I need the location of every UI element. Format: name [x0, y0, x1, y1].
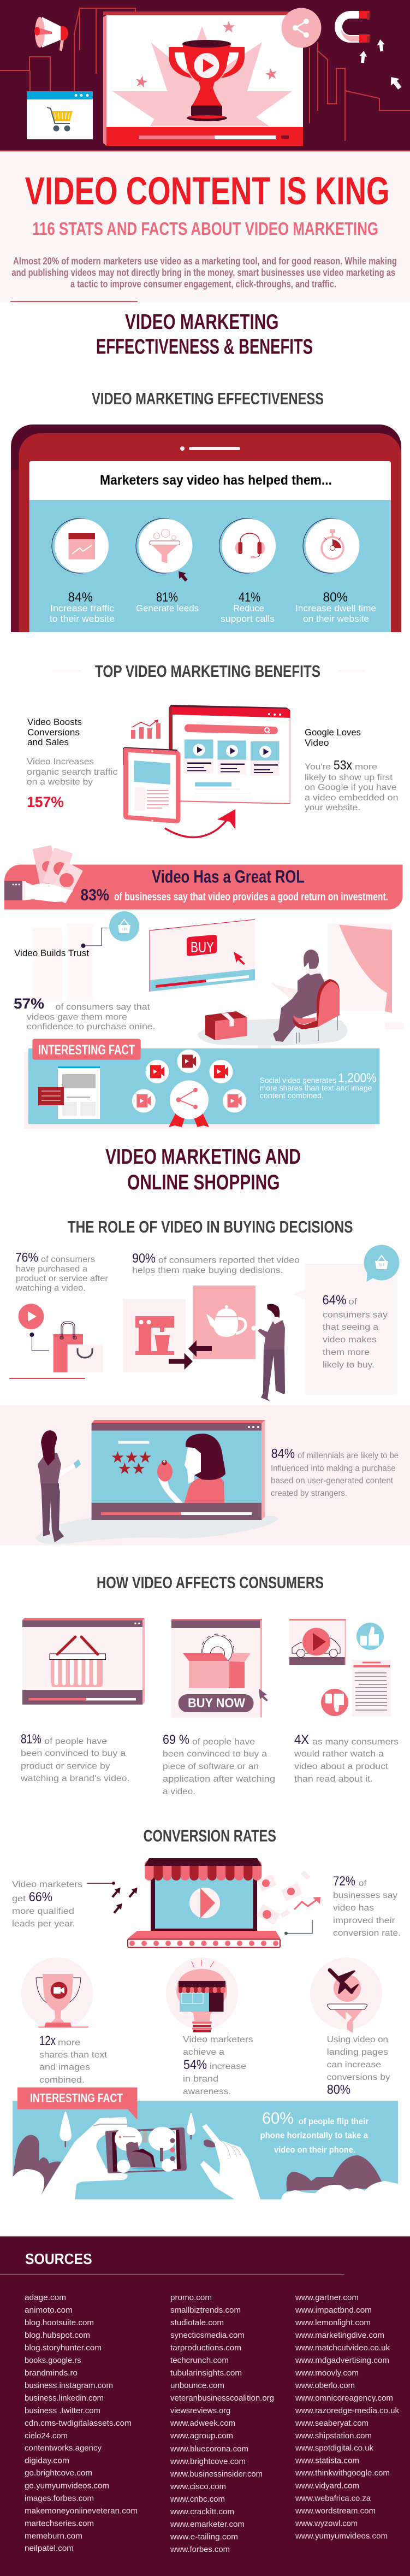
- star burst: [112, 26, 292, 126]
- panel: title block: [0, 151, 410, 302]
- callout connector: [83, 928, 107, 946]
- stat: 80% increase dwell time: 80%: [323, 590, 348, 605]
- fact text: 60%: [262, 2109, 294, 2127]
- text block: 54% brand awareness: in brand: [183, 2074, 218, 2084]
- text block: video builds trust: of consumers say that: [56, 1003, 150, 1012]
- icon: thumbs up: [356, 1623, 384, 1650]
- stat: 84% increase traffic: Increase traffic: [50, 603, 115, 614]
- panel: tablet with marketer stats: [11, 425, 401, 632]
- text block: 90% of consumers: [132, 1251, 300, 1275]
- text block: google loves video: more: [355, 763, 377, 771]
- text block: google loves video: [305, 728, 399, 812]
- text block: 4x as many consumers: would rather watch a: [294, 1749, 384, 1759]
- text block: google loves video: a video embedded on: [305, 793, 399, 803]
- icon: teapot: [206, 1305, 246, 1337]
- text block: 54% brand awareness: [183, 2035, 253, 2096]
- text block: video boosts conversions: on a website by: [27, 777, 93, 787]
- sources column 3: www.wyzowl.com: [295, 2520, 358, 2528]
- money bills: [257, 1871, 310, 1925]
- fact text: 1,200%: [338, 1071, 377, 1086]
- phone: [105, 2127, 187, 2173]
- player controls: [106, 127, 303, 146]
- illustration: product pages and shopper: [123, 1286, 285, 1401]
- sources column 2: veteranbusinesscoalition.org: [170, 2394, 274, 2403]
- icon: share: [282, 8, 321, 48]
- text block: 90% of consumers: helps them make buying dedisions.: [132, 1266, 283, 1275]
- tablet device: [123, 747, 180, 823]
- text block: video boosts conversions: 157%: [27, 794, 64, 810]
- text block: 69% of people: been convinced to buy a: [163, 1749, 267, 1759]
- text block: 4x as many consumers: video about a product: [294, 1762, 389, 1771]
- fact text: Social video generates: [260, 1076, 336, 1084]
- text block: 4x as many consumers: as many consumers: [312, 1737, 399, 1747]
- text block: 54% brand awareness: Video marketers: [183, 2035, 253, 2044]
- text block: video boosts conversions: Video Increases: [27, 757, 94, 767]
- sources column 1: blog.hubspot.com: [25, 2331, 90, 2340]
- stat: 41% reduce support calls: support calls: [221, 614, 275, 624]
- text block: video builds trust: confidence to purchase onine.: [27, 1022, 155, 1031]
- text block: 80% landing pages: Using video on: [327, 2035, 388, 2044]
- text block: video boosts conversions: [27, 717, 118, 810]
- presenter with perfume: [157, 1434, 225, 1503]
- sources column 1: brandminds.ro: [25, 2369, 78, 2378]
- speech panel: 64% of consumers: 64%: [322, 1293, 346, 1308]
- speech panel: 64% of consumers: of: [348, 1297, 358, 1307]
- sources column 2: www.businessinsider.com: [170, 2470, 263, 2479]
- bushes and clouds right: [281, 2155, 398, 2200]
- speech panel: 64% of consumers: video makes: [323, 1335, 377, 1345]
- sources heading: SOURCES: [25, 2250, 92, 2267]
- text block: 72% of businesses: improved their: [333, 1916, 395, 1925]
- speech panel: 64% of consumers: that seeing a: [323, 1323, 378, 1332]
- text block: 76% of consumers: 76%: [15, 1251, 38, 1265]
- stat: 84% increase traffic: [50, 518, 115, 624]
- sources column 1: business .twitter.com: [25, 2407, 100, 2415]
- icon: gear and box: [183, 1634, 251, 1688]
- text block: 81% of people: watching a brand's video.: [20, 1774, 129, 1783]
- text block: 80% landing pages: can increase: [327, 2060, 381, 2070]
- sources column 2: www.cnbc.com: [170, 2495, 225, 2504]
- sources column 3: www.shipstation.com: [295, 2432, 372, 2441]
- heading: effectiveness and benefits: EFFECTIVENESS & BENEFITS: [96, 335, 313, 358]
- arrow: curved red arrow: [165, 809, 235, 838]
- text block: 54% brand awareness: awareness.: [183, 2087, 231, 2096]
- icon: plane and funnel: [310, 1958, 382, 2033]
- panel: interesting fact social video: [24, 1039, 379, 1129]
- right hand: [204, 2139, 217, 2147]
- heading: effectiveness and benefits: VIDEO MARKETING: [125, 310, 278, 334]
- sources column 2: tubularinsights.com: [170, 2369, 242, 2378]
- text block: video builds trust: 57%: [14, 995, 44, 1012]
- text block: google loves video: your website.: [305, 803, 360, 812]
- sources column 2: www.adweek.com: [170, 2419, 235, 2428]
- text block: 76% of consumers: have purchased a: [16, 1264, 87, 1274]
- sources column 1: contentworks.agency: [25, 2444, 102, 2453]
- subheading: top video marketing benefits: TOP VIDEO MARKETING BENEFITS: [95, 662, 320, 681]
- text block: 76% of consumers: watching a video.: [15, 1284, 86, 1293]
- sources column 1: memeburn.com: [25, 2532, 82, 2540]
- icon: thumbs down: [321, 1689, 348, 1716]
- heading: video marketing and online shopping: VIDEO MARKETING AND: [105, 1145, 301, 1169]
- sources column 2: www.cisco.com: [170, 2483, 226, 2491]
- text block: 72% of businesses: businesses say: [333, 1891, 397, 1900]
- tablet heading: Marketers say video has helped them...: [100, 473, 332, 488]
- sources column 3: www.impactbnd.com: [295, 2306, 372, 2315]
- stat: 84% increase traffic: to their website: [50, 614, 115, 624]
- standing woman with phone: [38, 1430, 81, 1542]
- fact text: more shares than text and image: [260, 1083, 372, 1092]
- sources column 3: www.matchcutvideo.co.uk: [295, 2344, 390, 2353]
- text block: 72% of businesses: video has: [333, 1903, 374, 1913]
- icon: white arrows: [359, 39, 404, 92]
- fact text: video on their phone.: [274, 2145, 355, 2155]
- subheading: conversion rates: CONVERSION RATES: [143, 1826, 276, 1846]
- sources column 1: [25, 2294, 138, 2553]
- sources column 1: makemoneyonlineveteran.com: [25, 2507, 138, 2515]
- left hand: [41, 2117, 128, 2200]
- text block: 81% of people: of people have: [44, 1737, 107, 1746]
- sources column 3: www.thinkwithgoogle.com: [295, 2469, 390, 2478]
- text block: 72% of businesses: [284, 1874, 401, 1938]
- sources column 3: www.razoredge-media.co.uk: [295, 2407, 400, 2415]
- text block: 69% of people: a video.: [163, 1787, 195, 1796]
- sources column 1: cielo24.com: [25, 2432, 68, 2441]
- text block: 12x more shares: shares than text: [39, 2050, 108, 2060]
- sources column 2: synecticsmedia.com: [170, 2331, 245, 2340]
- text block: 12x more shares: [39, 2033, 108, 2085]
- tag: interesting fact: INTERESTING FACT: [30, 2091, 123, 2105]
- text block: 69% of people: 69 %: [163, 1732, 189, 1747]
- icon: growth chart: [131, 720, 161, 739]
- sources column 1: go.brightcove.com: [25, 2469, 92, 2478]
- text block: 76% of consumers: product or service after: [16, 1274, 109, 1283]
- text block: 80% landing pages: 80%: [327, 2083, 350, 2097]
- sources column 3: www.statista.com: [295, 2456, 359, 2465]
- text block: video boosts conversions: Conversions: [27, 728, 80, 738]
- icon: play and shopping bag: [9, 1304, 103, 1379]
- text block: 12x more shares: and images: [39, 2063, 90, 2072]
- text block: 54% brand awareness: achieve a: [183, 2048, 224, 2057]
- text block: google loves video: likely to show up first: [305, 773, 393, 782]
- sources column 3: [295, 2294, 400, 2540]
- sources column 3: www.mdgadvertising.com: [295, 2356, 389, 2365]
- text block: 4x as many consumers: than read about it.: [294, 1775, 373, 1784]
- text block: 81% of people: 81%: [21, 1732, 41, 1747]
- box: [205, 1011, 247, 1040]
- trees: [60, 2112, 72, 2141]
- intro paragraph: a tactic to improve consumer engagement, click-throughs, and traffic.: [70, 279, 336, 290]
- panel: sources: [0, 2236, 410, 2576]
- text block: 66% qualified leads: get: [12, 1894, 26, 1903]
- illustration: video versus reading: [289, 1619, 391, 1717]
- trend arrow: [294, 1899, 318, 1909]
- sources column 3: www.moovly.com: [295, 2369, 359, 2378]
- sources column 2: studiotale.com: [170, 2319, 224, 2327]
- text block: google loves video: You're: [305, 763, 331, 771]
- illustration: browser, tablet and chart: [123, 705, 290, 838]
- text block: 81% of people: product or service by: [21, 1761, 110, 1771]
- text block: 69% of people: of people have: [192, 1737, 255, 1747]
- icon: shopping cart window: [27, 91, 93, 139]
- text block: video boosts conversions: organic search traffic: [27, 768, 118, 777]
- sources column 3: www.spotdigital.co.uk: [295, 2444, 374, 2453]
- sources column 3: www.webafrica.co.za: [295, 2495, 371, 2503]
- button: buy now: BUY NOW: [188, 1696, 245, 1711]
- arrow: right arrow: [169, 1353, 193, 1370]
- icon: basket bubble: [364, 1245, 400, 1282]
- speech panel: 64% of consumers: [293, 1245, 400, 1395]
- banner: great ROI: [4, 845, 403, 910]
- sources column 3: www.gartner.com: [295, 2294, 359, 2302]
- icon: hand holding money: [4, 845, 83, 904]
- button: buy: [187, 935, 217, 956]
- sources column 2: tarproductions.com: [170, 2344, 241, 2353]
- text block: 80% landing pages: conversions by: [327, 2073, 390, 2082]
- heading: video marketing and online shopping: [105, 1145, 301, 1194]
- text block: 72% of businesses: 72%: [333, 1874, 355, 1889]
- panel: hero header: [0, 0, 410, 151]
- city skyline outline: [0, 8, 410, 141]
- illustration: video storefront: [110, 1858, 320, 1947]
- stat: 41% reduce support calls: 41%: [239, 590, 260, 605]
- sources column 2: www.emarketer.com: [170, 2520, 245, 2529]
- text block: 54% brand awareness: 54%: [183, 2058, 207, 2072]
- text block: 81% of people: [20, 1732, 129, 1783]
- browser window: [169, 705, 290, 804]
- icon: megaphone: [34, 17, 68, 51]
- text block: 84% of millennials: of millennials are likely to be: [298, 1451, 399, 1460]
- sources column 3: www.vidyard.com: [295, 2481, 359, 2490]
- rating stars: [112, 1451, 151, 1474]
- text block: 66% qualified leads: more qualified: [12, 1907, 74, 1916]
- sources column 2: www.bluecorona.com: [170, 2445, 248, 2454]
- tag: interesting fact: INTERESTING FACT: [38, 1042, 135, 1058]
- text block: 12x more shares: combined.: [39, 2076, 85, 2085]
- text block: 72% of businesses: conversion rate.: [333, 1929, 401, 1938]
- icon: video trophy: [21, 1958, 93, 2030]
- fact text: [260, 1071, 377, 1100]
- text block: 12x more shares: more: [58, 2038, 80, 2048]
- text block: 4x as many consumers: [294, 1732, 399, 1784]
- sources column 1: business.linkedin.com: [25, 2394, 104, 2403]
- text block: 69% of people: application after watching: [163, 1775, 275, 1784]
- text block: 4x as many consumers: 4X: [294, 1732, 309, 1747]
- subheading: how video affects consumers: HOW VIDEO AFFECTS CONSUMERS: [97, 1573, 324, 1592]
- fact text: [260, 2109, 369, 2155]
- icon: magnet: [338, 11, 370, 43]
- subheading: video marketing effectiveness: VIDEO MARKETING EFFECTIVENESS: [92, 389, 324, 408]
- sources column 1: cdn.cms-twdigitalassets.com: [25, 2419, 132, 2428]
- sources column 3: www.omnicoreagency.com: [295, 2394, 393, 2403]
- banner: great ROI: Video Has a Great ROL: [152, 867, 305, 887]
- sources column 2: www.crackitt.com: [170, 2508, 234, 2516]
- text block: 12x more shares: 12x: [39, 2033, 56, 2048]
- sources column 2: techcrunch.com: [170, 2356, 229, 2365]
- icon: shopping basket bubble: [109, 911, 139, 941]
- sources column 1: adage.com: [25, 2294, 66, 2302]
- text block: 69% of people: [163, 1732, 275, 1796]
- illustration: hands filming with phone: [13, 2112, 260, 2200]
- text block: 90% of consumers: 90%: [132, 1251, 156, 1266]
- sources column 3: www.oberlo.com: [295, 2382, 355, 2390]
- sources column 1: animoto.com: [25, 2306, 73, 2315]
- awning: [145, 1858, 262, 1881]
- sources column 2: [170, 2294, 274, 2554]
- text block: 84% of millennials: based on user-generated content: [271, 1476, 394, 1486]
- sources column 1: martechseries.com: [25, 2520, 94, 2528]
- stat: 41% reduce support calls: [219, 518, 276, 624]
- review video screen: [92, 1420, 265, 1520]
- text block: 80% landing pages: [327, 2035, 390, 2097]
- text block: 54% brand awareness: increase: [210, 2062, 246, 2071]
- text block: google loves video: Video: [305, 738, 329, 748]
- stat: 81% generate leads: [136, 518, 199, 614]
- standing man: [251, 1304, 285, 1401]
- text block: 81% of people: been convinced to buy a: [21, 1749, 126, 1758]
- icon: text document: [352, 1660, 391, 1717]
- sources column 2: www.brightcove.com: [170, 2457, 246, 2466]
- sources column 1: neilpatel.com: [25, 2544, 74, 2553]
- text block: 66% qualified leads: leads per year.: [12, 1919, 75, 1929]
- seated woman on chair: [272, 950, 340, 1044]
- icon: car: [292, 1638, 340, 1658]
- tag: interesting fact: [17, 2088, 137, 2120]
- banner: great ROI: 83%: [81, 886, 109, 904]
- sources column 1: books.google.rs: [25, 2356, 81, 2365]
- illustration: video builds trust scene: [33, 919, 404, 1046]
- text block: 84% of millennials: created by strangers.: [271, 1489, 347, 1498]
- text block: 84% of millennials: [271, 1447, 399, 1498]
- fact text: of people flip their: [299, 2117, 369, 2126]
- stat: 81% generate leads: Generate leeds: [136, 603, 199, 614]
- sources column 3: www.wordstream.com: [295, 2507, 376, 2515]
- icon: coffee machine: [135, 1316, 174, 1355]
- floor shadow: [198, 1018, 347, 1046]
- sources column 2: www.forbes.com: [170, 2545, 230, 2554]
- fact text: phone horizontally to take a: [260, 2131, 368, 2141]
- text block: 84% of millennials: Influenced into making a purchase: [271, 1464, 396, 1473]
- heading: effectiveness and benefits: [96, 310, 313, 358]
- video cards: [185, 740, 280, 776]
- sources column 2: smallbiztrends.com: [170, 2306, 241, 2315]
- curtain: [339, 924, 392, 1013]
- icon: web page: [38, 1066, 100, 1119]
- sources column 2: unbounce.com: [170, 2382, 224, 2390]
- text block: video builds trust: Video Builds Trust: [14, 948, 89, 958]
- sources column 2: promo.com: [170, 2294, 212, 2302]
- tag: interesting fact: [32, 1039, 141, 1060]
- stat: 80% increase dwell time: on their website: [303, 614, 369, 624]
- icon: bulb with store: [166, 1958, 238, 2032]
- speech panel: 64% of consumers: them more: [323, 1348, 370, 1357]
- sources column 1: business.instagram.com: [25, 2382, 113, 2390]
- panel: interesting fact phone flip: [13, 2088, 398, 2200]
- button: buy: BUY: [191, 939, 214, 956]
- sources column 3: www.lemonlight.com: [295, 2319, 371, 2327]
- stat: 84% increase traffic: 84%: [68, 590, 93, 605]
- text block: 66% qualified leads: Video marketers: [12, 1880, 82, 1889]
- text block: google loves video: 53x: [334, 758, 352, 773]
- text block: 66% qualified leads: 66%: [29, 1890, 52, 1905]
- button: buy now: [179, 1694, 254, 1712]
- illustration: basket video window: [22, 1618, 145, 1705]
- intro paragraph: [12, 256, 397, 290]
- sources column 1: images.forbes.com: [25, 2495, 94, 2503]
- panel: millennials section: [0, 1405, 410, 1546]
- speech panel: 64% of consumers: consumers say: [323, 1310, 388, 1319]
- video player window: [103, 11, 303, 146]
- icon: basket: [50, 1637, 106, 1687]
- text block: 90% of consumers: of consumers reported thet video: [158, 1255, 300, 1265]
- text block: 80% landing pages: landing pages: [327, 2048, 388, 2057]
- text block: video boosts conversions: Video Boosts: [27, 717, 82, 727]
- heading: video marketing and online shopping: ONLINE SHOPPING: [127, 1171, 280, 1194]
- sources column 1: go.yumyumvideos.com: [25, 2481, 109, 2490]
- sources column 2: viewsreviews.org: [170, 2407, 230, 2415]
- text block: 76% of consumers: of consumers: [41, 1255, 95, 1264]
- sources column 1: digiday.com: [25, 2456, 69, 2465]
- text block: 76% of consumers: [15, 1251, 109, 1293]
- text block: video boosts conversions: and Sales: [27, 738, 69, 747]
- sources column 2: www.agroup.com: [170, 2432, 233, 2441]
- sources column 3: www.marketingdive.com: [295, 2331, 384, 2340]
- sources column 1: blog.hootsuite.com: [25, 2319, 94, 2327]
- stat: 80% increase dwell time: [295, 518, 376, 624]
- stat: 80% increase dwell time: Increase dwell time: [295, 603, 376, 614]
- bushes and clouds left: [13, 2135, 61, 2195]
- speech panel: 64% of consumers: likely to buy.: [323, 1360, 375, 1370]
- sources column 3: www.seaberyat.com: [295, 2419, 369, 2428]
- text block: video builds trust: videos gave them more: [27, 1013, 127, 1022]
- text block: 69% of people: piece of software or an: [163, 1762, 259, 1771]
- text block: 84% of millennials: 84%: [271, 1447, 295, 1461]
- sources column 1: blog.storyhunter.com: [25, 2344, 102, 2353]
- text block: 66% qualified leads: [12, 1880, 115, 1929]
- sources column 2: www.e-tailing.com: [170, 2533, 238, 2542]
- stat: 41% reduce support calls: Reduce: [233, 603, 264, 614]
- stat: 81% generate leads: 81%: [156, 590, 178, 605]
- video screen: [150, 919, 255, 992]
- text block: video builds trust: [14, 948, 155, 1031]
- sources column 3: www.yumyumvideos.com: [295, 2532, 388, 2540]
- text block: 72% of businesses: of: [359, 1879, 367, 1888]
- text block: google loves video: on Google if you have: [305, 783, 397, 792]
- floor shadow: [35, 1514, 278, 1544]
- fact text: content combined.: [260, 1091, 324, 1100]
- text block: google loves video: Google Loves: [305, 728, 361, 738]
- trophy: [169, 40, 245, 121]
- icon: share badge with cameras: [132, 1050, 246, 1127]
- arrows: rising: [110, 1885, 140, 1915]
- illustration: buy now window: [171, 1619, 268, 1718]
- arrow: left arrow: [188, 1340, 212, 1357]
